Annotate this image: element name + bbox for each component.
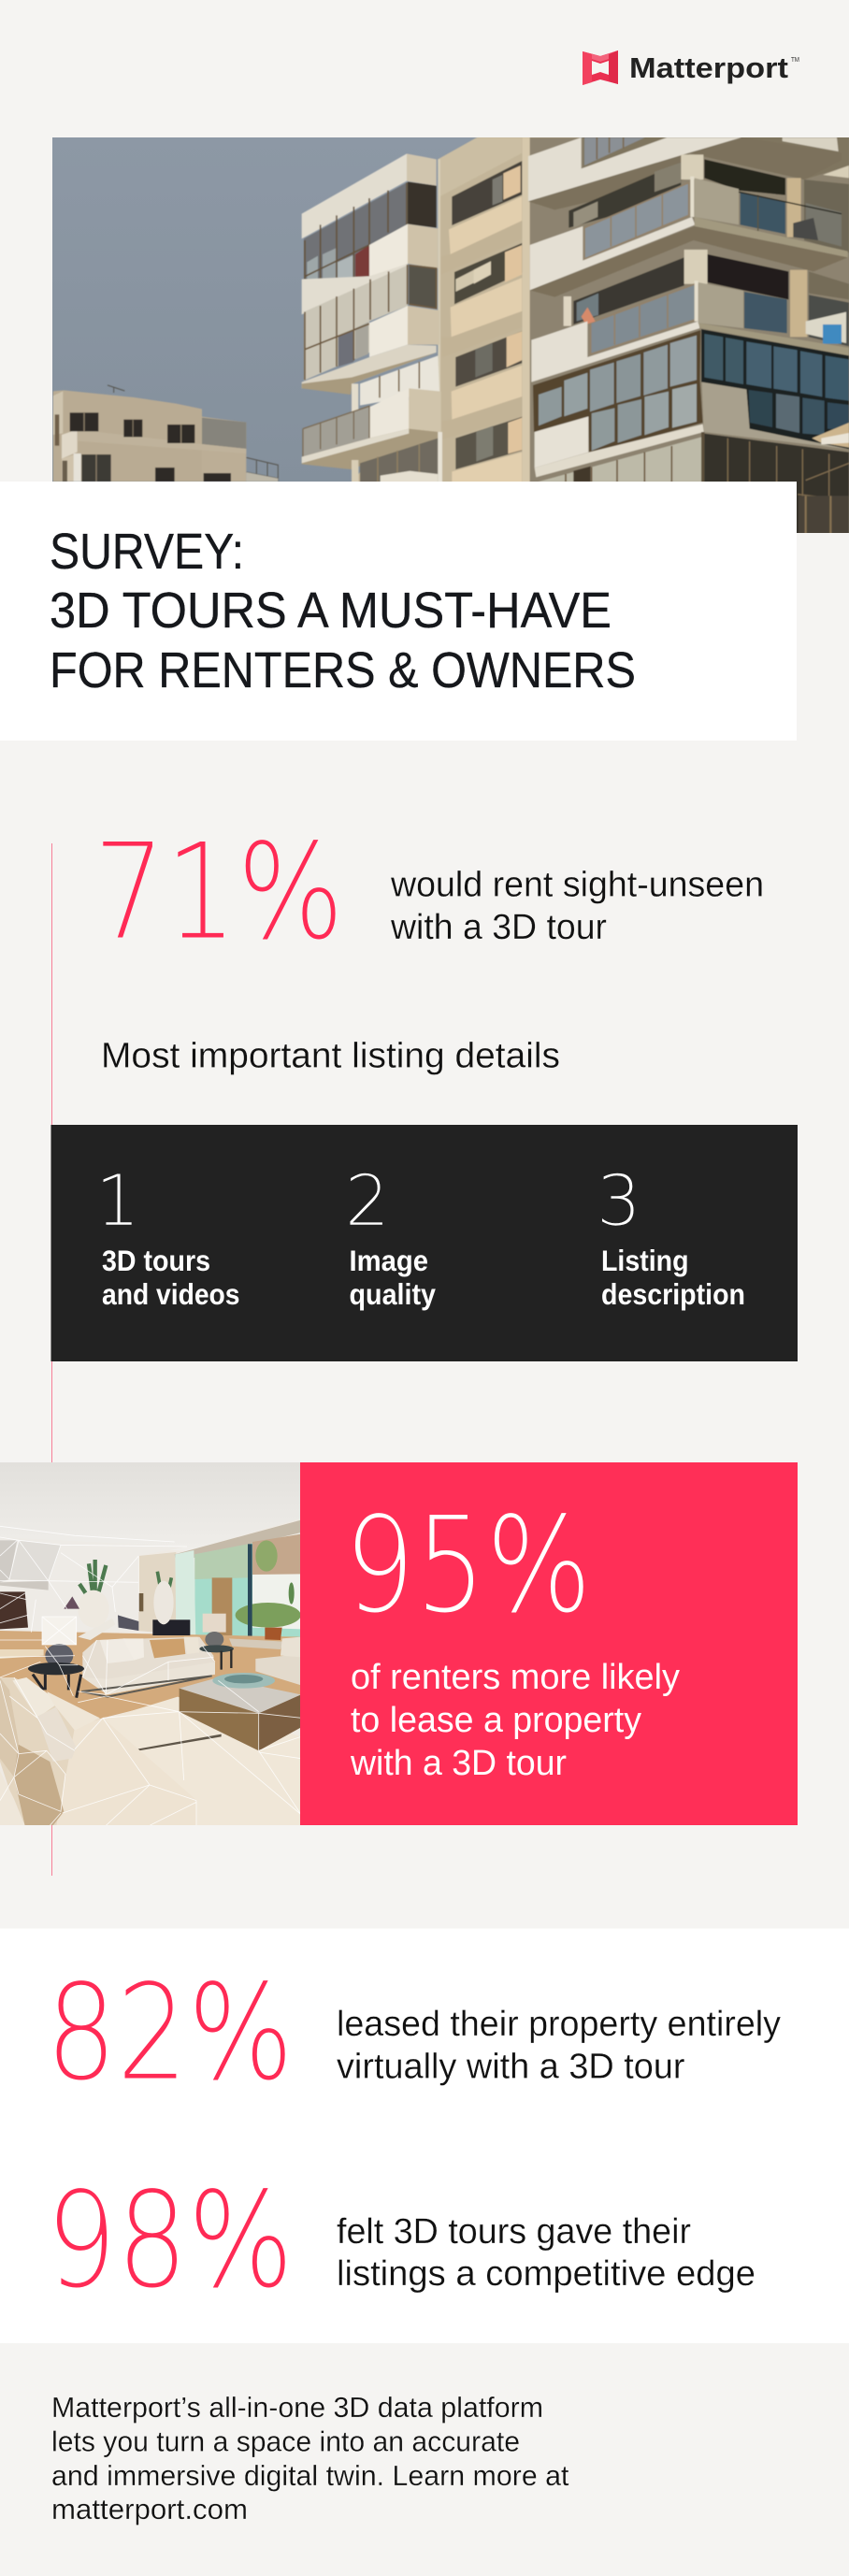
description: to lease a property: [351, 1701, 641, 1740]
centre sofa: [82, 1637, 215, 1694]
wordmark: Matterport: [629, 51, 788, 84]
icon: Matterport fold mark: [583, 50, 618, 85]
title panel: [0, 482, 797, 741]
footer text: matterport.com: [51, 2493, 248, 2526]
stat: 98%: felt 3D tours gave their: [337, 2212, 691, 2252]
timeline rule: [51, 843, 52, 1876]
stat: 98%: listings a competitive edge: [337, 2254, 755, 2294]
subheading: Most important listing details: [101, 1036, 560, 1075]
fourth floor windows: [533, 330, 703, 453]
stat: 82%: leased their property entirely: [337, 2005, 781, 2044]
number: 95%: [344, 1489, 592, 1643]
stat: 98%: 98%: [46, 2164, 294, 2318]
tower: left block and centre column: [302, 136, 580, 483]
third floor: [573, 257, 684, 324]
side table: [28, 1662, 84, 1675]
rank 2: quality: [350, 1277, 436, 1311]
rank 3: description: [601, 1277, 745, 1311]
rug: [105, 1696, 300, 1825]
foreground sofa: [0, 1677, 100, 1827]
logo: Matterport: [583, 50, 799, 85]
small building bottom left: [53, 385, 278, 482]
title: SURVEY:: [50, 524, 244, 580]
rank 2: [345, 1159, 436, 1311]
rank 2: 2: [345, 1159, 390, 1242]
footer text: Matterport’s all-in-one 3D data platform: [51, 2391, 543, 2424]
description: of renters more likely: [351, 1658, 680, 1697]
description: [390, 866, 764, 947]
description: with a 3D tour: [350, 1744, 567, 1783]
stat: 98%: [46, 2164, 755, 2318]
bottom row: [538, 437, 703, 482]
title: 3D TOURS A MUST-HAVE: [50, 583, 612, 639]
description: with a 3D tour: [390, 908, 607, 947]
rank 1: 3D tours: [102, 1244, 210, 1277]
left block: floor one: [302, 153, 407, 238]
rank 1: [95, 1159, 239, 1311]
number: 71%: [94, 815, 344, 970]
footer text: [51, 2391, 569, 2526]
photo: living room with 3D mesh: [0, 1462, 302, 1827]
left block: lower floors: [351, 383, 359, 411]
rank 3: 3: [597, 1159, 641, 1242]
coffee table: [180, 1677, 301, 1713]
stat: 82%: virtually with a 3D tour: [337, 2048, 685, 2087]
tower: right block: [522, 136, 849, 537]
stat: 82%: 82%: [46, 1956, 294, 2110]
panel: owner stats: [0, 1928, 849, 2343]
description: [350, 1658, 680, 1783]
description: would rent sight-unseen: [390, 866, 764, 905]
rank 1: and videos: [102, 1277, 239, 1311]
title: FOR RENTERS & OWNERS: [50, 642, 636, 698]
panel: 95%: [300, 1462, 798, 1825]
rank 2: Image: [350, 1244, 428, 1277]
first floor: [583, 136, 849, 180]
left block: floor two: [304, 266, 408, 381]
photo: apartment building: [52, 136, 849, 537]
trademark: TM: [791, 57, 799, 64]
title: [50, 524, 636, 698]
rank 1: 1: [95, 1159, 140, 1242]
footer text: and immersive digital twin. Learn more at: [51, 2459, 569, 2492]
rank 3: Listing: [601, 1244, 688, 1277]
stat: 82%: [46, 1956, 781, 2110]
second floor: [568, 174, 682, 228]
stat: 71%: [94, 815, 764, 970]
rank 3: [597, 1159, 745, 1311]
right dark glazing: [701, 329, 849, 449]
footer text: lets you turn a space into an accurate: [51, 2425, 520, 2457]
3D mesh overlay: [0, 1526, 301, 1825]
centre bands: [440, 137, 522, 194]
panel: ranking: [50, 1125, 798, 1361]
